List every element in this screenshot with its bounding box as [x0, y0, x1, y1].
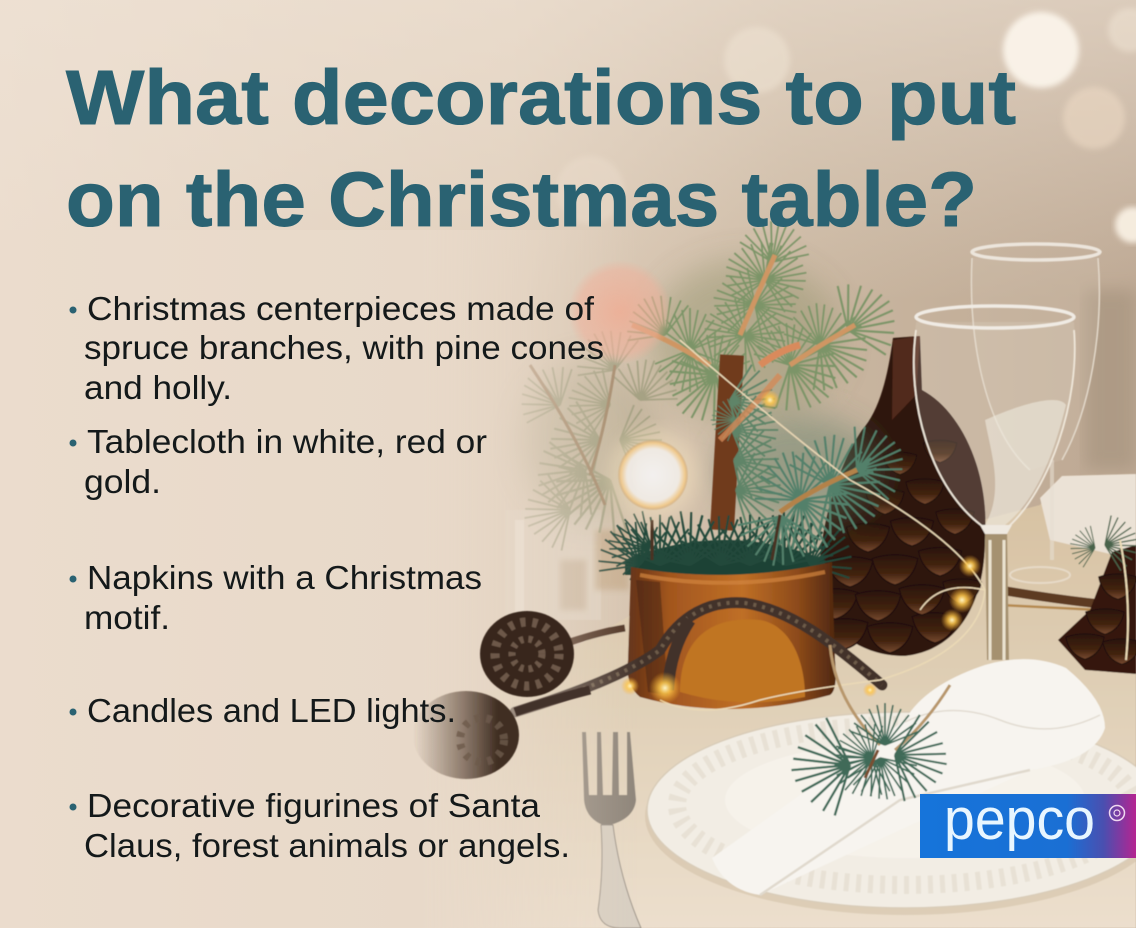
left faded pine branch	[505, 316, 687, 556]
title: What decorations to put	[66, 55, 1016, 141]
fairy lights	[621, 340, 985, 710]
twig over pot	[515, 603, 882, 712]
bullet list	[70, 290, 604, 864]
bokeh lights	[556, 8, 1136, 243]
faded jar behind pot	[505, 510, 629, 620]
item: figurines: Decorative figurines of Santa	[87, 787, 541, 824]
logo: pepco: pepco	[944, 787, 1095, 852]
trunk with needles	[711, 355, 786, 532]
lower dark branches	[584, 503, 869, 590]
item: napkins	[70, 559, 482, 636]
upper spruce branches	[614, 215, 913, 441]
item: figurines: Claus, forest animals or angels.	[84, 827, 570, 864]
light bulb	[607, 429, 699, 521]
logo: pepco	[920, 787, 1136, 858]
back wine glass	[971, 244, 1100, 583]
photo scene	[0, 215, 1136, 928]
table surface	[0, 474, 1136, 928]
item: napkins: motif.	[84, 599, 170, 636]
item: centerpieces: Christmas centerpieces made of	[87, 290, 595, 327]
front wine glass	[914, 306, 1075, 660]
front bright branch	[652, 413, 918, 573]
pink bokeh glow	[568, 260, 672, 364]
item: tablecloth	[70, 423, 487, 500]
napkin	[712, 659, 1105, 895]
item: centerpieces: and holly.	[84, 369, 232, 406]
item: candles: Candles and LED lights.	[87, 692, 456, 729]
item: figurines	[70, 787, 570, 864]
item: tablecloth: Tablecloth in white, red or	[87, 423, 487, 460]
sprig on napkin	[787, 645, 954, 819]
item: napkins: Napkins with a Christmas	[87, 559, 482, 596]
left fade overlay	[0, 230, 640, 928]
foliage tone under needles	[520, 260, 880, 525]
plate	[645, 712, 1136, 915]
copper pot	[515, 562, 882, 712]
title: on the Christmas table?	[66, 157, 977, 243]
small pine cones	[413, 611, 590, 779]
big pine cone	[812, 336, 986, 656]
title	[66, 55, 1016, 243]
item: centerpieces: spruce branches, with pine cones	[84, 329, 604, 366]
fork	[582, 732, 641, 928]
right pine cones and twig	[1000, 512, 1136, 674]
item: tablecloth: gold.	[84, 463, 161, 500]
item: centerpieces	[70, 290, 604, 406]
